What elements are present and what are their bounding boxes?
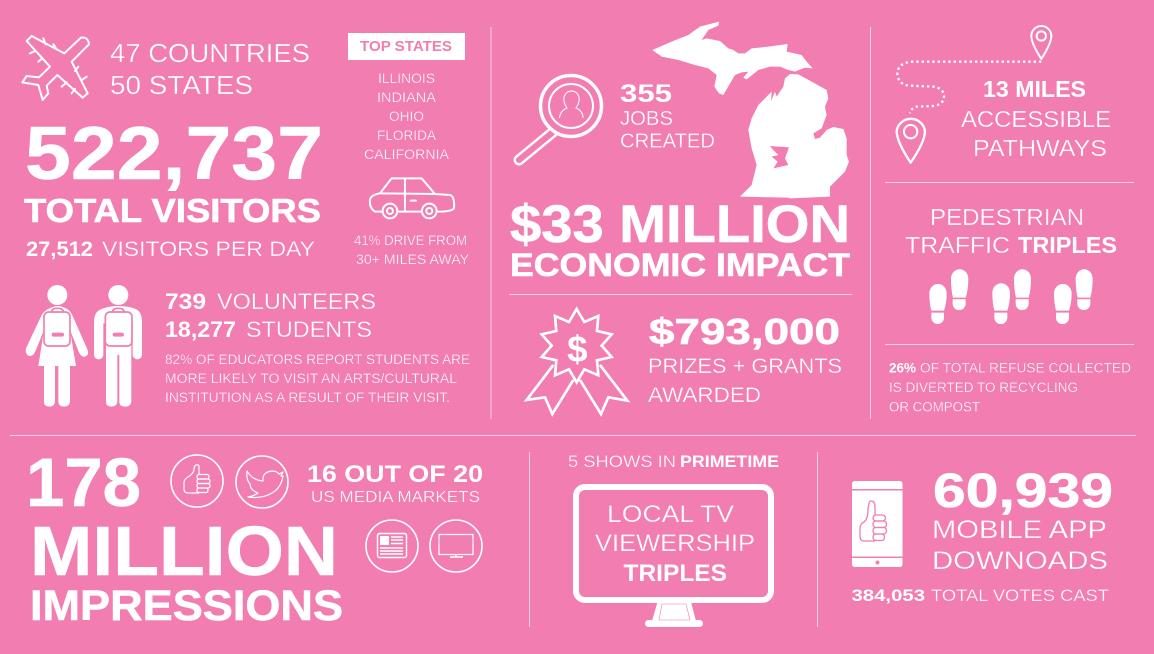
text: countries and states (110, 40, 310, 100)
list: states: INDIANA (377, 90, 436, 105)
text: mobile app downloads: MOBILE APP (932, 516, 1107, 544)
heading: impressions: IMPRESSIONS (30, 582, 343, 630)
icon: magnifying glass (519, 76, 602, 160)
badge: top states (348, 33, 465, 60)
text: educators report: MORE LIKELY TO VISIT AN ARTS/CULTURAL (165, 371, 457, 386)
text: jobs created (620, 80, 715, 152)
list: states: CALIFORNIA (364, 147, 449, 162)
panel: recycling: 26% (889, 360, 916, 376)
text: primetime shows: 5 SHOWS IN (568, 453, 676, 471)
text: educators report: 82% OF EDUCATORS REPORT STUDENTS ARE (165, 352, 470, 367)
text: viewership: LOCAL TV (607, 501, 734, 528)
text: countries and states: 50 STATES (110, 72, 253, 100)
list: states: ILLINOIS (378, 71, 435, 86)
text: educators report (165, 352, 470, 405)
text: miles of pathways: ACCESSIBLE (961, 106, 1111, 132)
text: students (165, 317, 372, 342)
text: mobile app downloads (932, 516, 1108, 575)
text: votes cast: 384,053 (852, 586, 925, 605)
text: votes cast: TOTAL VOTES CAST (931, 586, 1109, 605)
icon: footprints (929, 269, 1093, 324)
badge: top states: TOP STATES (360, 38, 452, 55)
text: media markets: US MEDIA MARKETS (311, 489, 480, 506)
panel: mobile app (852, 465, 1113, 605)
text: pedestrian traffic triples: PEDESTRIAN (930, 204, 1084, 230)
text: volunteers: 739 (165, 289, 206, 314)
text: jobs created: CREATED (620, 130, 715, 152)
text: students: STUDENTS (246, 317, 372, 342)
panel: local tv (568, 453, 779, 627)
panel: economic impact (510, 22, 851, 283)
text: pedestrian traffic triples: TRAFFIC (905, 232, 1010, 258)
list: states: OHIO (389, 109, 424, 124)
big number: economic impact: $33 MILLION (510, 195, 850, 254)
icon: award ribbon: $ (567, 329, 588, 370)
icon: award ribbon (527, 309, 627, 414)
list: states (364, 71, 449, 162)
icon: car (370, 178, 454, 218)
icon: television circle (430, 520, 482, 572)
big number: app downloads: 60,939 (933, 465, 1113, 518)
text: viewership: VIEWERSHIP (595, 530, 755, 557)
text: volunteers: VOLUNTEERS (217, 289, 376, 314)
text: miles of pathways: 13 MILES (983, 76, 1086, 102)
panel: recycling: OF TOTAL REFUSE COLLECTED (920, 360, 1131, 376)
text: media markets: 16 OUT OF 20 (307, 461, 483, 488)
text: prizes amount: PRIZES + GRANTS (648, 355, 842, 378)
panel: recycling (889, 360, 1131, 414)
panel: recycling: IS DIVERTED TO RECYCLING (889, 380, 1078, 395)
icon: students (26, 285, 142, 407)
text: pedestrian traffic triples (905, 204, 1117, 258)
icon: twitter circle (236, 456, 288, 508)
heading: economic impact: ECONOMIC IMPACT (510, 247, 851, 283)
icon: newspaper circle (366, 520, 418, 572)
map: Michigan (652, 22, 849, 198)
text: pedestrian traffic triples: TRIPLES (1018, 232, 1117, 258)
icon: monitor (576, 487, 771, 627)
text: drive distance: 41% DRIVE FROM (354, 233, 467, 248)
text: primetime shows (568, 453, 779, 471)
text: prizes amount: $793,000 (649, 311, 840, 352)
text: miles of pathways (961, 76, 1111, 161)
icon: route with pins (897, 26, 1051, 163)
text: miles of pathways: PATHWAYS (973, 135, 1107, 161)
big word: million: MILLION (30, 512, 338, 590)
icon: airplane (22, 36, 89, 100)
panel: accessible pathways (897, 26, 1111, 163)
big number: 178: 178 (26, 444, 141, 521)
text: drive distance (354, 233, 469, 267)
text: votes cast (852, 586, 1109, 605)
text: mobile app downloads: DOWNOADS (932, 547, 1108, 575)
text: prizes amount: AWARDED (648, 384, 761, 407)
text: media markets (307, 461, 483, 506)
text: countries and states: 47 COUNTRIES (110, 40, 310, 68)
text: prizes amount (648, 311, 842, 407)
panel: visitors (22, 36, 323, 261)
icon: phone with thumb (852, 481, 902, 567)
panel: recycling: OR COMPOST (889, 400, 980, 414)
big number: total visitors: 522,737 (25, 111, 323, 195)
text: drive distance: 30+ MILES AWAY (356, 252, 469, 267)
text: visitors per day (26, 237, 315, 261)
text: educators report: INSTITUTION AS A RESULT OF THEIR VISIT. (165, 390, 450, 405)
text: jobs created: JOBS (620, 108, 673, 130)
panel: pedestrian traffic (905, 204, 1117, 324)
icon: thumbs up circle (171, 455, 223, 507)
panel: volunteers and students (26, 285, 470, 407)
panel: impressions (26, 444, 483, 630)
text: viewership (595, 501, 755, 587)
text: viewership: TRIPLES (624, 560, 727, 587)
text: jobs created: 355 (620, 80, 672, 108)
panel: top states (348, 33, 469, 267)
list: states: FLORIDA (377, 128, 436, 143)
text: students: 18,277 (165, 317, 236, 342)
panel: prizes and grants (527, 309, 842, 414)
text: visitors per day: VISITORS PER DAY (102, 237, 315, 261)
heading: total visitors: TOTAL VISITORS (24, 192, 321, 229)
text: visitors per day: 27,512 (26, 237, 93, 261)
text: primetime shows: PRIMETIME (680, 453, 779, 471)
